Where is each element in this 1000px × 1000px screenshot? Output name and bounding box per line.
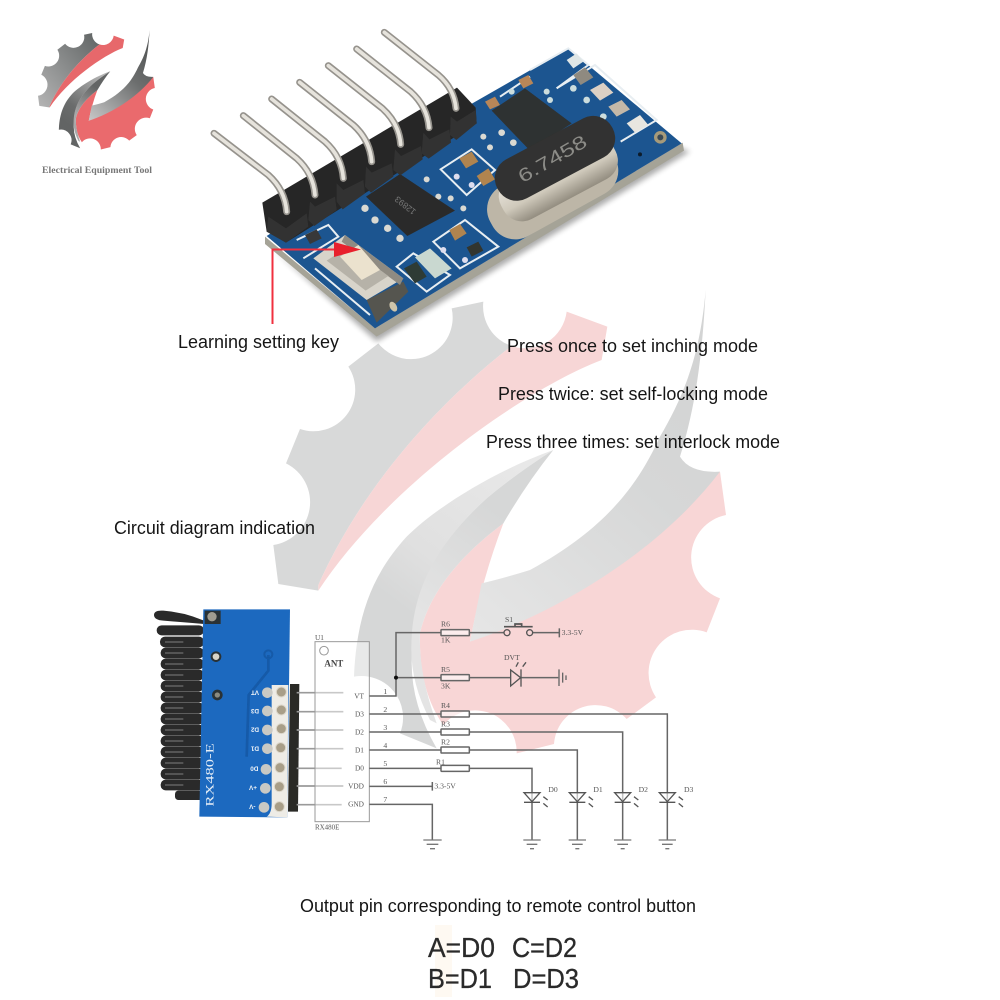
antenna trace bbox=[247, 655, 268, 757]
schematic labels: D3 bbox=[684, 785, 694, 794]
watermark: lower red gear piece bbox=[420, 472, 726, 753]
schematic labels: D2 bbox=[639, 785, 648, 794]
schematic labels: R6 bbox=[441, 620, 450, 629]
board text: D3 bbox=[250, 707, 259, 714]
schematic labels: 7 bbox=[383, 795, 387, 804]
board text: VT bbox=[251, 689, 259, 696]
coil antenna bbox=[154, 611, 204, 800]
schematic labels: R2 bbox=[441, 737, 450, 746]
logo: lower red gear piece bbox=[76, 77, 155, 150]
crystal oscillator: 6.7458 bbox=[514, 131, 590, 187]
schematic labels: 6 bbox=[383, 777, 387, 786]
instructions text: Press once to set inching mode bbox=[507, 336, 758, 356]
wires bbox=[369, 628, 667, 840]
silkscreen outlines and pads bbox=[297, 48, 657, 315]
board text bbox=[248, 689, 259, 809]
bent header pins bbox=[214, 32, 456, 212]
pin mapping table: A=D0 bbox=[428, 932, 495, 963]
background watermark logo bbox=[273, 290, 726, 753]
lead wires bbox=[297, 693, 343, 805]
schematic labels: R3 bbox=[441, 719, 450, 728]
U1 chip block: ANT bbox=[324, 659, 343, 669]
caption: output pin mapping: Output pin corresponding to remote control button bbox=[300, 896, 696, 916]
U1 chip block: GND bbox=[348, 800, 364, 809]
schematic labels: S1 bbox=[505, 615, 513, 624]
small surface components bbox=[305, 53, 667, 283]
board text: +V bbox=[248, 783, 257, 790]
logo: gray gear piece bbox=[38, 33, 100, 108]
pin mapping table: D=D3 bbox=[513, 963, 579, 994]
logo: upper red arc bbox=[50, 36, 124, 108]
header solder area bbox=[267, 685, 288, 817]
resistors bbox=[441, 630, 469, 771]
solder pads bbox=[259, 687, 273, 813]
schematic labels: D1 bbox=[593, 785, 603, 794]
U1 chip block: D1 bbox=[355, 746, 364, 755]
decoder chip: 12893 bbox=[393, 194, 418, 217]
header strip bbox=[288, 684, 299, 812]
watermark: curved blade bbox=[470, 290, 720, 642]
blue PCB surface bbox=[267, 48, 682, 328]
U1 chip block: RX480E bbox=[315, 823, 339, 831]
U1 chip block: VDD bbox=[348, 782, 364, 791]
schematic labels: 1K bbox=[441, 636, 451, 645]
U1 chip block: D3 bbox=[355, 710, 364, 719]
watermark: swoosh inner band bbox=[411, 450, 553, 723]
logo: swoosh outer band bbox=[59, 71, 110, 148]
schematic labels: 1 bbox=[383, 687, 387, 696]
logo: curved blade bbox=[89, 30, 153, 121]
instructions text bbox=[486, 336, 780, 452]
board text: -V bbox=[248, 802, 255, 809]
schematic labels: R1 bbox=[436, 758, 445, 767]
schematic labels: R5 bbox=[441, 665, 450, 674]
board text: D0 bbox=[250, 765, 258, 772]
watermark: swoosh outer band bbox=[354, 450, 553, 748]
U1 chip block: VT bbox=[354, 691, 365, 700]
watermark: gray gear piece bbox=[273, 302, 512, 591]
chip legs bbox=[361, 129, 517, 242]
logo caption: Electrical Equipment Tool bbox=[42, 166, 152, 176]
pin header blocks bbox=[262, 88, 477, 243]
output LEDs D0-D3 bbox=[524, 793, 683, 807]
decoder chip bbox=[366, 174, 455, 236]
schematic labels: 3K bbox=[441, 682, 451, 691]
schematic labels: D0 bbox=[548, 785, 558, 794]
schematic labels: DVT bbox=[504, 653, 520, 662]
board text: D2 bbox=[250, 726, 259, 733]
U1 chip block: D0 bbox=[355, 764, 364, 773]
instructions text: Press twice: set self-locking mode bbox=[498, 384, 768, 404]
blue module board bbox=[199, 609, 290, 817]
schematic labels: R4 bbox=[441, 701, 450, 710]
ground symbol bbox=[559, 669, 566, 686]
pin mapping table: C=D2 bbox=[512, 932, 577, 963]
schematic labels: 3.3-5V bbox=[434, 781, 456, 790]
learning tactile button bbox=[313, 235, 408, 323]
U1 chip block bbox=[315, 633, 369, 831]
RX480-E module photo bbox=[154, 609, 343, 817]
receiver board photo bbox=[214, 32, 690, 342]
schematic labels: 3.3-5V bbox=[562, 628, 584, 637]
schematic labels: 5 bbox=[383, 759, 387, 768]
schematic labels: 4 bbox=[383, 741, 387, 750]
watermark: upper red arc bbox=[318, 312, 607, 591]
switch S1 bbox=[504, 624, 533, 636]
status LED DVT bbox=[511, 662, 526, 687]
logo: swoosh inner band bbox=[74, 71, 110, 142]
pin mapping table bbox=[428, 925, 579, 997]
model name: RX480-E bbox=[202, 743, 216, 807]
instructions text: Press three times: set interlock mode bbox=[486, 432, 780, 452]
ground symbols bbox=[423, 840, 676, 849]
schematic labels: 3 bbox=[383, 723, 387, 732]
mounting holes bbox=[205, 611, 223, 700]
board text: D1 bbox=[250, 744, 259, 751]
schematic wiring bbox=[369, 615, 694, 849]
logo bbox=[38, 30, 155, 150]
schematic labels bbox=[383, 615, 694, 804]
U1 chip block: D2 bbox=[355, 728, 364, 737]
schematic labels: 2 bbox=[383, 705, 387, 714]
heading: circuit diagram indication: Circuit diagram indication bbox=[114, 518, 315, 538]
top chip bbox=[492, 88, 572, 151]
board shadow bbox=[273, 147, 690, 342]
board edge bbox=[265, 143, 684, 337]
pin mapping table: B=D1 bbox=[428, 963, 492, 994]
label: learning setting key: Learning setting key bbox=[178, 332, 339, 352]
crystal oscillator bbox=[478, 108, 628, 249]
red pointer arrow bbox=[272, 242, 361, 324]
U1 chip block: U1 bbox=[315, 633, 324, 642]
